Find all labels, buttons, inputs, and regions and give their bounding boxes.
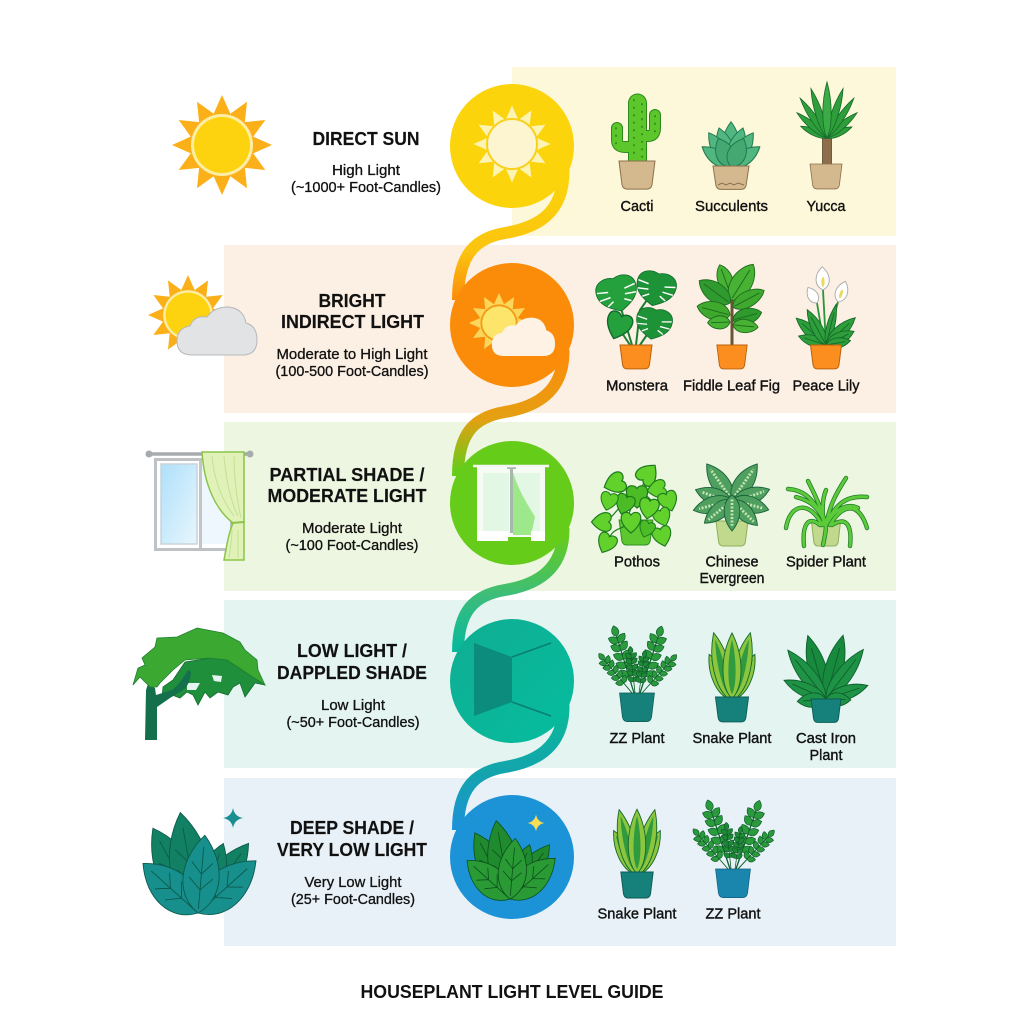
plant: peace lily: [792, 267, 860, 394]
icon: fiddle leaf fig: [694, 259, 768, 369]
label: [796, 730, 856, 764]
plant: cacti: [616, 100, 655, 215]
plant: cast iron plant: [781, 633, 870, 764]
heading and light details: partial shade: [268, 464, 427, 554]
label: ZZ Plant: [610, 730, 665, 747]
heading and light details: low light: (~50+ Foot-Candles): [286, 715, 420, 731]
label: ZZ Plant: [706, 906, 761, 922]
circle: direct sun: [450, 84, 574, 208]
circle: partial shade: [450, 441, 574, 565]
heading and light details: low light: DAPPLED SHADE: [277, 662, 427, 683]
heading and light details: direct sun: [291, 128, 441, 196]
heading and light details: deep shade: VERY LOW LIGHT: [277, 839, 428, 860]
title: HOUSEPLANT LIGHT LEVEL GUIDE: [360, 982, 664, 1002]
label: Yucca: [806, 198, 846, 215]
ribbon: orange to green connector: [458, 350, 564, 476]
icon: yucca: [795, 82, 859, 189]
ribbon: yellow to orange connector: [458, 170, 564, 300]
icon: pothos: [592, 459, 681, 556]
label: [700, 554, 764, 587]
panel: low light: [224, 600, 896, 768]
heading and light details: direct sun: High Light: [332, 163, 400, 179]
heading and light details: deep shade: [277, 817, 428, 908]
label: Pothos: [614, 554, 660, 570]
heading and light details: partial shade: MODERATE LIGHT: [268, 485, 427, 506]
label: Cacti: [620, 198, 654, 215]
icon: chinese evergreen: [691, 459, 772, 546]
plant: snake plant, deep shade: [598, 808, 677, 922]
icon: peace lily: [792, 267, 859, 369]
icon: window with curtain: [146, 450, 254, 560]
circle: low light with room corner: [450, 619, 574, 743]
ribbon: teal to blue connector: [458, 705, 564, 830]
icon: monstera: [593, 268, 679, 369]
icon: large sun: [172, 95, 272, 195]
plant: monstera: [593, 268, 679, 394]
heading and light details: bright indirect: INDIRECT LIGHT: [281, 311, 425, 332]
heading and light details: deep shade: Very Low Light: [304, 875, 402, 891]
label: Plant: [810, 747, 843, 764]
icon: snake plant: [607, 808, 667, 898]
icon: cast iron plant: [781, 633, 870, 722]
panel: partial shade: [224, 422, 896, 591]
label: Snake Plant: [692, 730, 772, 747]
label: Evergreen: [700, 570, 764, 587]
heading and light details: partial shade: Moderate Light: [302, 521, 402, 537]
heading and light details: bright indirect: BRIGHT: [318, 290, 386, 311]
icon: leaf cluster with star: [131, 808, 268, 927]
plant: pothos: [592, 459, 681, 570]
plant: spider plant: [786, 478, 867, 570]
heading and light details: low light: LOW LIGHT /: [297, 640, 407, 661]
plant: zz plant: [593, 623, 682, 747]
circle: deep shade: [450, 795, 574, 919]
icon: tree: [133, 628, 265, 740]
label: Peace Lily: [792, 378, 860, 394]
panel: bright indirect light: [224, 245, 896, 413]
label: Snake Plant: [598, 906, 677, 922]
icon: spider plant: [786, 478, 867, 546]
ribbon: green to teal connector: [458, 528, 564, 652]
icon: succulent: [698, 122, 764, 189]
heading and light details: deep shade: (25+ Foot-Candles): [291, 892, 415, 908]
heading and light details: direct sun: DIRECT SUN: [312, 128, 420, 149]
plant: zz plant, deep shade: [687, 797, 780, 922]
plant: chinese evergreen: [691, 459, 772, 587]
label: Monstera: [606, 378, 669, 394]
heading and light details: deep shade: DEEP SHADE /: [290, 817, 414, 838]
plant: succulents: [695, 122, 768, 215]
label: Cast Iron: [796, 730, 856, 747]
plant: fiddle leaf fig: [683, 259, 780, 394]
circle: bright indirect: [450, 263, 574, 387]
heading and light details: low light: Low Light: [321, 698, 385, 714]
icon: zz plant: [593, 623, 682, 722]
label: Fiddle Leaf Fig: [683, 378, 780, 394]
icon: cactus: [616, 100, 655, 189]
icon: zz plant: [687, 797, 780, 898]
panel: direct sun: [512, 67, 896, 236]
icon: sun behind cloud: [148, 275, 257, 355]
heading and light details: direct sun: (~1000+ Foot-Candles): [291, 180, 441, 196]
heading and light details: bright indirect: [276, 290, 428, 380]
heading and light details: partial shade: (~100 Foot-Candles): [286, 538, 418, 554]
label: Succulents: [695, 198, 768, 215]
plant: yucca: [795, 82, 859, 215]
heading and light details: low light: [277, 640, 427, 731]
heading and light details: bright indirect: (100-500 Foot-Candles): [276, 364, 428, 380]
label: Chinese: [706, 554, 758, 570]
icon: snake plant: [703, 631, 761, 722]
heading and light details: partial shade: PARTIAL SHADE /: [270, 464, 424, 485]
heading and light details: bright indirect: Moderate to High Light: [276, 347, 428, 363]
panel: deep shade: [224, 778, 896, 946]
plant: snake plant: [692, 631, 772, 747]
label: Spider Plant: [786, 554, 867, 570]
